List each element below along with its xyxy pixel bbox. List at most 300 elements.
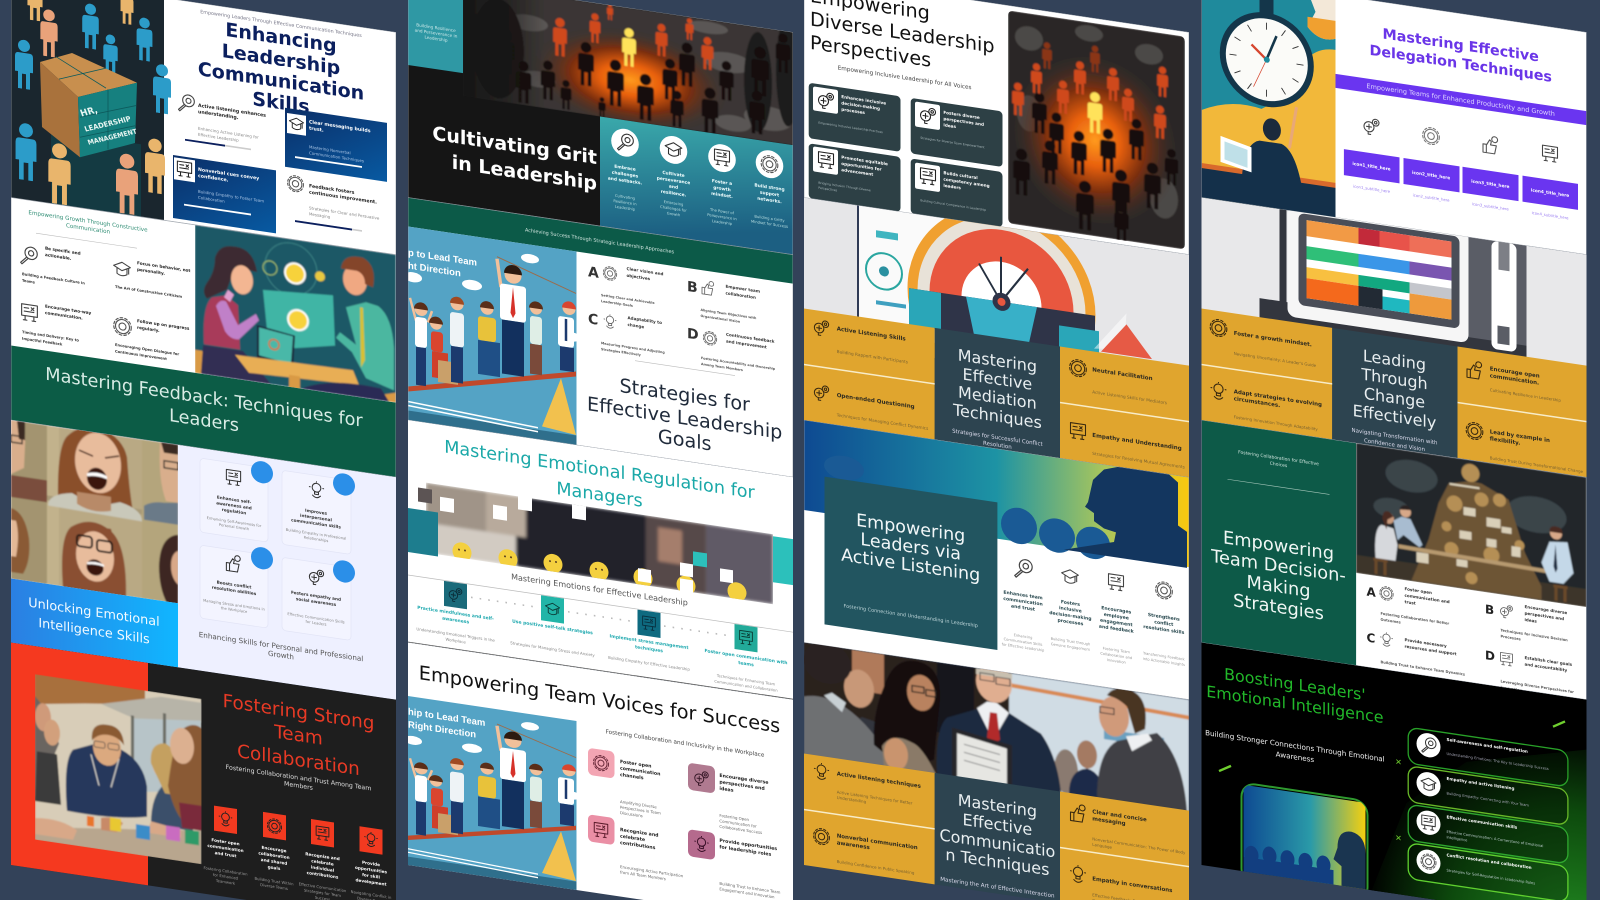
title: Managers xyxy=(556,479,643,512)
item: conflict resolution: Strategies for Self-Regulation in Leadership Roles xyxy=(1446,868,1535,886)
image: two people discussing with tablet xyxy=(195,225,396,405)
item: neutral facilitation: Active Listening Skills for Mediators xyxy=(1092,389,1167,405)
card: diverse perspectives: perspectives and xyxy=(943,116,984,127)
subtitle: Strategies for Successful Conflict xyxy=(952,429,1044,448)
item: two-way communication: Impactful Feedback xyxy=(22,337,63,347)
item: icon3 xyxy=(1462,132,1518,213)
item B: B xyxy=(687,279,698,296)
item D: Fostering Accountability and Ownership xyxy=(701,356,776,371)
item: foster open: Fostering Collaboration xyxy=(203,865,248,877)
card: interpersonal xyxy=(282,464,355,555)
footer text: Enhancing Skills for Personal and Professional xyxy=(199,630,363,663)
item: conflict resolution: Conflict resolution and collaboration xyxy=(1446,852,1532,870)
item: recognize xyxy=(299,817,347,900)
title: Communicatio xyxy=(939,825,1055,861)
title card: Active Listening xyxy=(841,546,980,586)
item A: Outcomes xyxy=(1380,618,1401,625)
item: lead by example: flexibility. xyxy=(1490,436,1520,447)
step 3: Building Empathy for Effective Leadership xyxy=(608,655,690,672)
card: active listening: Enhancing Active Listening for xyxy=(198,126,259,140)
item: leadership roles: Engagement and Innovation xyxy=(719,886,775,900)
item: encourage xyxy=(254,811,294,892)
item: self-awareness: Understanding Emotions: The Key to Leadership Success xyxy=(1446,752,1549,771)
item: growth mindset xyxy=(707,142,737,227)
image: clock and manager illustration xyxy=(1202,0,1336,218)
title: Effectively xyxy=(1353,401,1437,432)
item: support networks: support xyxy=(760,190,779,199)
item: open communication: communication. xyxy=(1490,373,1539,387)
item: two-way communication xyxy=(21,303,92,346)
decorative sparks xyxy=(1218,669,1566,868)
card: feedback: Strategies for Clear and Persuasive xyxy=(309,205,380,221)
item: team communication: and trust xyxy=(1011,603,1036,613)
title card xyxy=(824,477,997,650)
item: conflict resolution: Transforming Feedback xyxy=(1142,651,1186,662)
image: team on seesaw boat: p to Lead Team xyxy=(408,248,477,269)
title: Diverse Leadership xyxy=(810,7,995,58)
title block: Unlocking Emotional xyxy=(28,596,160,630)
tag block: Building Resilience xyxy=(416,22,456,33)
item: adapt strategies: Fostering Innovation Through Adaptability xyxy=(1234,414,1318,432)
item D: Establish clear goals xyxy=(1524,655,1573,667)
item: employee engagement: Collaboration and xyxy=(1100,652,1132,660)
panel: Leading Through Change Effectively xyxy=(1202,194,1586,478)
tag block: Leadership xyxy=(424,34,448,43)
item B: B xyxy=(1485,602,1494,617)
title: Skills xyxy=(252,87,310,118)
item: embrace: and setbacks. xyxy=(608,175,642,187)
title: Change xyxy=(1364,384,1425,412)
card: equitable opportunities: Perspectives xyxy=(818,186,838,192)
tag block xyxy=(408,0,463,73)
item: nonverbal awareness: Nonverbal communication xyxy=(837,833,918,851)
item: inclusive decisions: Genuine Engagement xyxy=(1051,642,1091,652)
card: empathy xyxy=(282,551,355,641)
card: self-awareness: Enhancing Self-Awareness for xyxy=(207,516,262,528)
item: inclusive decisions: Fosters xyxy=(1061,599,1080,608)
item: be specific: Be specific and xyxy=(45,246,81,256)
image: team on seesaw boat: hip to Lead Team xyxy=(408,707,485,729)
title: Communication xyxy=(198,57,364,105)
item B: perspectives and xyxy=(1524,610,1564,621)
card: cultural competency: competency among xyxy=(943,177,990,188)
item: diverse perspectives: ideas xyxy=(719,786,734,794)
item: be specific: Building a Feedback Culture in xyxy=(22,272,85,286)
step 2: Use positive self-talk strategies xyxy=(512,618,593,636)
item: icon2 xyxy=(1404,124,1460,204)
step 3: Implement stress management xyxy=(609,633,689,651)
item: clear messaging: Nonverbal Communication: The Power of Body xyxy=(1092,836,1186,855)
item: growth mindset: mindset. xyxy=(711,191,733,200)
item: be specific xyxy=(20,246,85,284)
title: Collaboration xyxy=(237,741,360,780)
image: silhouette speaker with audience xyxy=(804,415,1189,573)
step 1: awareness xyxy=(442,616,469,626)
item B: Aligning Team Objectives with xyxy=(700,308,757,320)
item: open channels: channels xyxy=(620,772,644,781)
image: gauge dashboard illustration xyxy=(804,178,1189,424)
item C xyxy=(588,309,665,361)
title block: Intelligence Skills xyxy=(38,616,150,648)
card: diverse perspectives: Strategies for Diverse Team Empowerment xyxy=(920,136,985,149)
card: interpersonal: communication skills xyxy=(291,517,341,530)
item D: and improvement xyxy=(726,339,767,350)
title: Mastering Emotional Regulation for xyxy=(444,437,755,504)
item: recognize contributions: Recognize and xyxy=(620,827,659,839)
item: leadership roles: Provide opportunities xyxy=(719,838,777,852)
item: empathy: Empathy and Understanding xyxy=(1092,433,1182,452)
item: inclusive decisions: Building Trust through xyxy=(1051,637,1090,646)
panel: Cultivating Grit in Leadership xyxy=(408,0,800,256)
card: active listening: Active listening enhances xyxy=(198,103,266,119)
item: employee engagement: engagement xyxy=(1100,618,1133,628)
item: provide: development xyxy=(356,877,386,887)
items panel xyxy=(600,117,793,255)
item: open communication: Cultivating Resilience in Leadership xyxy=(1490,387,1561,403)
item: icon1: icon1_title_here xyxy=(1352,161,1391,173)
item: recognize: celebrate xyxy=(311,858,334,867)
item A: trust xyxy=(1404,599,1416,606)
card: inclusive decisions: Empowering Inclusive Leadership Practices xyxy=(818,121,883,134)
item: growth mindset: growth xyxy=(713,185,731,193)
subtitle: Mastering Emotions for Effective Leadership xyxy=(511,572,688,608)
panel: Mastering Feedback xyxy=(11,198,396,478)
item: encourage: collaboration xyxy=(258,850,290,860)
item: open channels: Perspectives in Team xyxy=(620,805,661,816)
footer text: Growth xyxy=(268,649,294,662)
image: laughing faces grid xyxy=(11,415,178,605)
item: diverse perspectives: Encourage diverse xyxy=(719,773,768,786)
item: two-way communication: communication. xyxy=(45,310,83,321)
decorative sparks: ✕ xyxy=(1395,833,1402,843)
item: recognize: Strategies for Team xyxy=(304,888,341,898)
item B: ideas xyxy=(1524,617,1537,624)
item: open channels: Foster open xyxy=(620,759,652,770)
item: active listening techniques: Active listening techniques xyxy=(837,771,922,790)
title: Emotional Intelligence xyxy=(1206,682,1384,727)
step 1 xyxy=(416,577,495,649)
image: team on seesaw boat: Right Direction xyxy=(408,720,476,741)
item: recognize: contributions xyxy=(307,870,339,880)
panel: Fostering Strong Team Collaboration xyxy=(11,642,396,900)
item: growth mindset: Foster a growth mindset. xyxy=(1234,331,1312,348)
item: follow up: Continuous Improvement xyxy=(115,349,167,361)
item: icon4: icon4_subtitle_here xyxy=(1532,210,1569,221)
item: conflict resolution: Strengthens xyxy=(1148,612,1180,623)
card: cultural competency: Building Cultural Competence in Leadership xyxy=(920,198,986,212)
step 1: Understanding Emotional Triggers in the xyxy=(416,626,495,643)
item: leadership roles xyxy=(688,829,781,900)
card: self-awareness: Personal Growth xyxy=(219,523,250,531)
step 4 xyxy=(704,620,788,694)
item: team communication: Communication Skills xyxy=(1004,637,1042,647)
item A xyxy=(1366,581,1450,632)
item: perseverance: resilience. xyxy=(661,189,687,199)
subtitle: Awareness xyxy=(1276,750,1314,764)
title: Effective xyxy=(963,810,1032,839)
card: diverse perspectives: Fosters diverse xyxy=(943,110,980,120)
header band: Achieving Success Through Strategic Leadership Approaches xyxy=(525,227,674,256)
item: open-ended questioning xyxy=(814,384,928,431)
title: Goals xyxy=(658,425,712,456)
item: conflict resolution: resolution skills xyxy=(1143,624,1185,636)
item: provide: Navigating Conflict in xyxy=(351,889,392,900)
title: in Leadership xyxy=(452,151,597,195)
image: HR leadership cube with figures: HR, xyxy=(79,106,99,119)
card: self-awareness: regulation xyxy=(222,507,246,516)
card: empathy: Fosters empathy and xyxy=(291,590,341,602)
panel: Empowering Leaders via Active Listening xyxy=(804,415,1189,700)
card: equitable opportunities: Promotes equitable xyxy=(841,155,888,166)
title: Leadership xyxy=(222,39,340,80)
card: clear messaging: Mastering Nonverbal xyxy=(309,144,351,155)
title: Perspectives xyxy=(810,31,931,72)
card: nonverbal cues xyxy=(173,155,276,233)
card: feedback: Messaging xyxy=(309,211,331,219)
image: HR leadership cube with figures: LEADERSHIP xyxy=(83,114,132,134)
item: embrace: Embrace xyxy=(614,164,636,173)
step 3: techniques xyxy=(635,644,663,654)
title: Mastering xyxy=(958,790,1037,821)
item: growth mindset xyxy=(1210,318,1317,368)
card: equitable opportunities: advancement xyxy=(841,167,873,177)
item A: Leadership Goals xyxy=(601,299,633,308)
item: perseverance: Embracing xyxy=(664,200,684,207)
item B: collaboration xyxy=(726,290,756,300)
card: equitable opportunities: Bridging Inclusion Through Diverse xyxy=(818,181,871,192)
card: conflict resolution: Boosts conflict xyxy=(217,580,251,590)
title block xyxy=(11,578,178,668)
image: team on seesaw boat xyxy=(404,226,580,446)
title: n Techniques xyxy=(945,845,1049,879)
image: glowing figure in dark crowd xyxy=(475,0,792,145)
subtitle: Empowering Inclusive Leadership for All Voices xyxy=(838,66,972,91)
item A: communication and xyxy=(1404,593,1450,604)
subtitle: Confidence and Vision xyxy=(1364,438,1426,453)
item: employee engagement: Encourages xyxy=(1101,605,1132,616)
subtitle: Fostering Collaboration and Inclusivity in the Workplace xyxy=(606,729,765,759)
item D: and accountability xyxy=(1524,661,1568,673)
item: recognize contributions: Encouraging Active Participation xyxy=(620,864,684,878)
item: foster open: Foster open xyxy=(211,837,240,846)
item: support networks: Build strong xyxy=(754,182,785,193)
item: inclusive decisions: inclusive xyxy=(1059,605,1082,615)
item D: Among Team Members xyxy=(701,362,743,372)
item D xyxy=(1485,648,1574,700)
item: follow up: regularly. xyxy=(137,325,160,333)
card: self-awareness xyxy=(200,452,273,543)
card: active listening: understanding. xyxy=(198,109,239,121)
card: empathy: for Leaders xyxy=(306,620,326,627)
card: nonverbal cues: Collaboration xyxy=(198,195,225,204)
card: cultural competency: Builds cultural xyxy=(943,170,978,180)
item B: Techniques for Inclusive Decision xyxy=(1500,628,1568,642)
item D xyxy=(687,326,776,377)
card: conflict resolution xyxy=(200,538,273,629)
title: Mastering Effective xyxy=(1383,26,1539,66)
item: icon1 xyxy=(1344,115,1400,195)
item: empathy in conversations xyxy=(1070,864,1173,900)
item C: change xyxy=(628,322,644,329)
item: effective communication: Effective Communication: A Cornerstone of Emotional xyxy=(1446,830,1543,848)
item: active listening techniques: Understanding xyxy=(837,795,867,804)
item: open-ended questioning: Open-ended Questioning xyxy=(837,393,915,410)
item: foster open: communication xyxy=(207,843,244,853)
panel: Mastering Emotional Regulation for Managers xyxy=(408,420,793,700)
item: employee engagement: Fostering Team xyxy=(1103,646,1130,654)
card: self-awareness: awareness and xyxy=(216,500,252,511)
title panel xyxy=(1202,420,1356,666)
item: encourage: Encourage xyxy=(262,845,287,853)
item: recognize: individual xyxy=(311,864,335,873)
item: team communication: for Effective Leadership xyxy=(1002,642,1045,653)
item: support networks: Building a Gritty xyxy=(754,214,785,223)
item: icon1: icon1_subtitle_here xyxy=(1353,184,1391,194)
title panel: Making xyxy=(1246,572,1311,602)
item: empathy: Strategies for Resolving Mutual Agreements xyxy=(1092,451,1185,470)
item: active listening techniques: Active Listening Techniques for Better xyxy=(837,789,913,806)
item: team communication: communication xyxy=(1003,596,1043,608)
title panel: Choices xyxy=(1270,461,1288,469)
item: recognize contributions xyxy=(588,814,684,884)
item C: Strategies Effectively xyxy=(601,347,642,357)
title band: Mastering Feedback: Techniques for xyxy=(45,364,363,432)
item: leadership roles: Building Trust to Enhance Team xyxy=(719,881,781,895)
item: encourage: and shared xyxy=(261,857,287,866)
item: clear messaging: Clear and concise xyxy=(1092,809,1147,823)
item: team communication: Enhances team xyxy=(1003,590,1043,601)
item: lead by example: Lead by example in xyxy=(1490,429,1550,444)
step 4: Techniques for Enhancing Team xyxy=(716,674,776,687)
title card: Empowering xyxy=(856,511,965,547)
image: crowd silhouette frame xyxy=(1242,782,1368,900)
item: foster open xyxy=(203,804,248,888)
item: clear messaging xyxy=(1070,803,1186,861)
image: emoji row with blurred suit xyxy=(408,479,793,611)
item: open channels: communication xyxy=(620,766,660,777)
image: team with building blocks xyxy=(35,674,202,865)
item C: C xyxy=(1366,631,1375,646)
item B: Processes xyxy=(1500,634,1521,641)
item: embrace: Resilience in xyxy=(613,199,637,207)
item: nonverbal awareness xyxy=(814,828,918,876)
subtitle band xyxy=(1336,74,1586,125)
item: provide: opportunities xyxy=(355,865,388,875)
item: diverse perspectives: Collaborative Success xyxy=(719,824,762,835)
item: active listening skills: Building Rapport with Participants xyxy=(837,349,908,364)
item: diverse perspectives xyxy=(688,763,768,836)
item A: objectives xyxy=(626,273,651,281)
item: employee engagement: Innovation xyxy=(1107,658,1126,665)
panel: Empowering Team Decision-Making Strategies xyxy=(1202,420,1586,702)
item: growth mindset: Leadership xyxy=(712,219,733,226)
step 3 xyxy=(608,605,690,672)
item: icon4 xyxy=(1522,142,1578,222)
title: Fostering Strong xyxy=(223,691,374,734)
item C xyxy=(1366,630,1465,677)
card: diverse perspectives xyxy=(911,98,1002,167)
card: feedback xyxy=(288,175,380,235)
card: inclusive decisions: processes xyxy=(841,107,865,115)
step 2 xyxy=(510,591,595,658)
card: cultural competency: leaders xyxy=(943,183,961,190)
item: neutral facilitation xyxy=(1070,359,1167,405)
title: Team xyxy=(273,722,323,750)
step 4: Foster open communication with xyxy=(704,648,788,666)
panel: Mastering Effective Delegation Techniques xyxy=(1202,0,1586,255)
item: foster open: and trust xyxy=(215,850,236,858)
item C: resources and support xyxy=(1404,644,1457,656)
card: nonverbal cues: Nonverbal cues convey xyxy=(198,167,259,182)
image: team on seesaw boat: ht Direction xyxy=(408,261,461,279)
title: Leading xyxy=(1363,346,1426,374)
item B: Organizational Vision xyxy=(700,314,741,324)
item: growth mindset: Perseverance in xyxy=(707,213,737,221)
item: two-way communication: Timing and Delivery: Key to xyxy=(22,330,79,343)
item: diverse perspectives: Fostering Open xyxy=(719,813,750,822)
subtitle: Members xyxy=(284,781,313,792)
heading: Communication xyxy=(66,223,110,236)
card: cultural competency xyxy=(911,158,1002,227)
card: empathy: social awareness xyxy=(296,596,337,607)
title panel: Team Decision- xyxy=(1210,546,1346,587)
image: award handshake photo xyxy=(803,634,1189,814)
item: icon4: icon4_title_here xyxy=(1531,187,1569,199)
item: encourage: goals xyxy=(268,864,281,871)
card: inclusive decisions: Enhances inclusive xyxy=(841,94,886,106)
card: inclusive decisions: decision-making xyxy=(841,100,880,111)
item B xyxy=(1485,598,1568,648)
card: self-awareness: Enhances self- xyxy=(217,495,251,505)
item: perseverance xyxy=(657,134,690,219)
image: team with wooden gear pile xyxy=(1356,443,1586,607)
item C: Measuring Progress and Adjusting xyxy=(601,341,665,355)
title: Boosting Leaders' xyxy=(1224,664,1366,704)
item: two-way communication: Encourage two-way xyxy=(45,304,91,315)
item: leadership roles: for leadership roles xyxy=(719,844,771,858)
title: Enhancing xyxy=(225,18,337,57)
item: icon3: icon3_title_here xyxy=(1471,179,1509,190)
item: icon2: icon2_subtitle_here xyxy=(1413,192,1450,203)
item D: Leveraging Diverse Perspectives for xyxy=(1500,679,1574,694)
item A: Clear vision and xyxy=(626,266,664,276)
card: inclusive decisions xyxy=(809,83,900,152)
panel: Unlocking Emotional Intelligence Skills xyxy=(11,415,396,701)
item C: C xyxy=(588,311,598,329)
title: Delegation Techniques xyxy=(1369,43,1552,86)
item: embrace xyxy=(608,126,642,213)
item: encourage: Building Trust Within xyxy=(254,876,294,887)
subtitle band: Empowering Teams for Enhanced Productivity and Growth xyxy=(1367,82,1555,118)
item: focus on behavior: Focus on behavior, not xyxy=(137,260,190,273)
item: employee engagement xyxy=(1099,572,1135,666)
card: clear messaging: Clear messaging builds xyxy=(309,119,371,134)
item D: D xyxy=(687,326,699,344)
card: conflict resolution: Managing Stress and Emotions in xyxy=(203,599,266,612)
item: open channels xyxy=(588,748,661,821)
item: effective communication: Intelligence xyxy=(1446,835,1468,843)
item A: Fostering Collaboration for Better xyxy=(1380,612,1449,626)
image: team on seesaw boat xyxy=(404,695,580,891)
image: tablet with colour chart xyxy=(1202,194,1586,367)
item: be specific: Teams xyxy=(22,279,35,285)
card: nonverbal cues: Building Empathy to Foster Team xyxy=(198,189,264,204)
title: Effective xyxy=(963,365,1032,394)
item C: Building Trust to Enhance Team Dynamics xyxy=(1380,660,1465,677)
subtitle: Building Stronger Connections Through Emotional xyxy=(1205,728,1385,764)
item: diverse perspectives: perspectives and xyxy=(719,779,765,792)
image: glowing figure among crowd xyxy=(1008,10,1185,251)
